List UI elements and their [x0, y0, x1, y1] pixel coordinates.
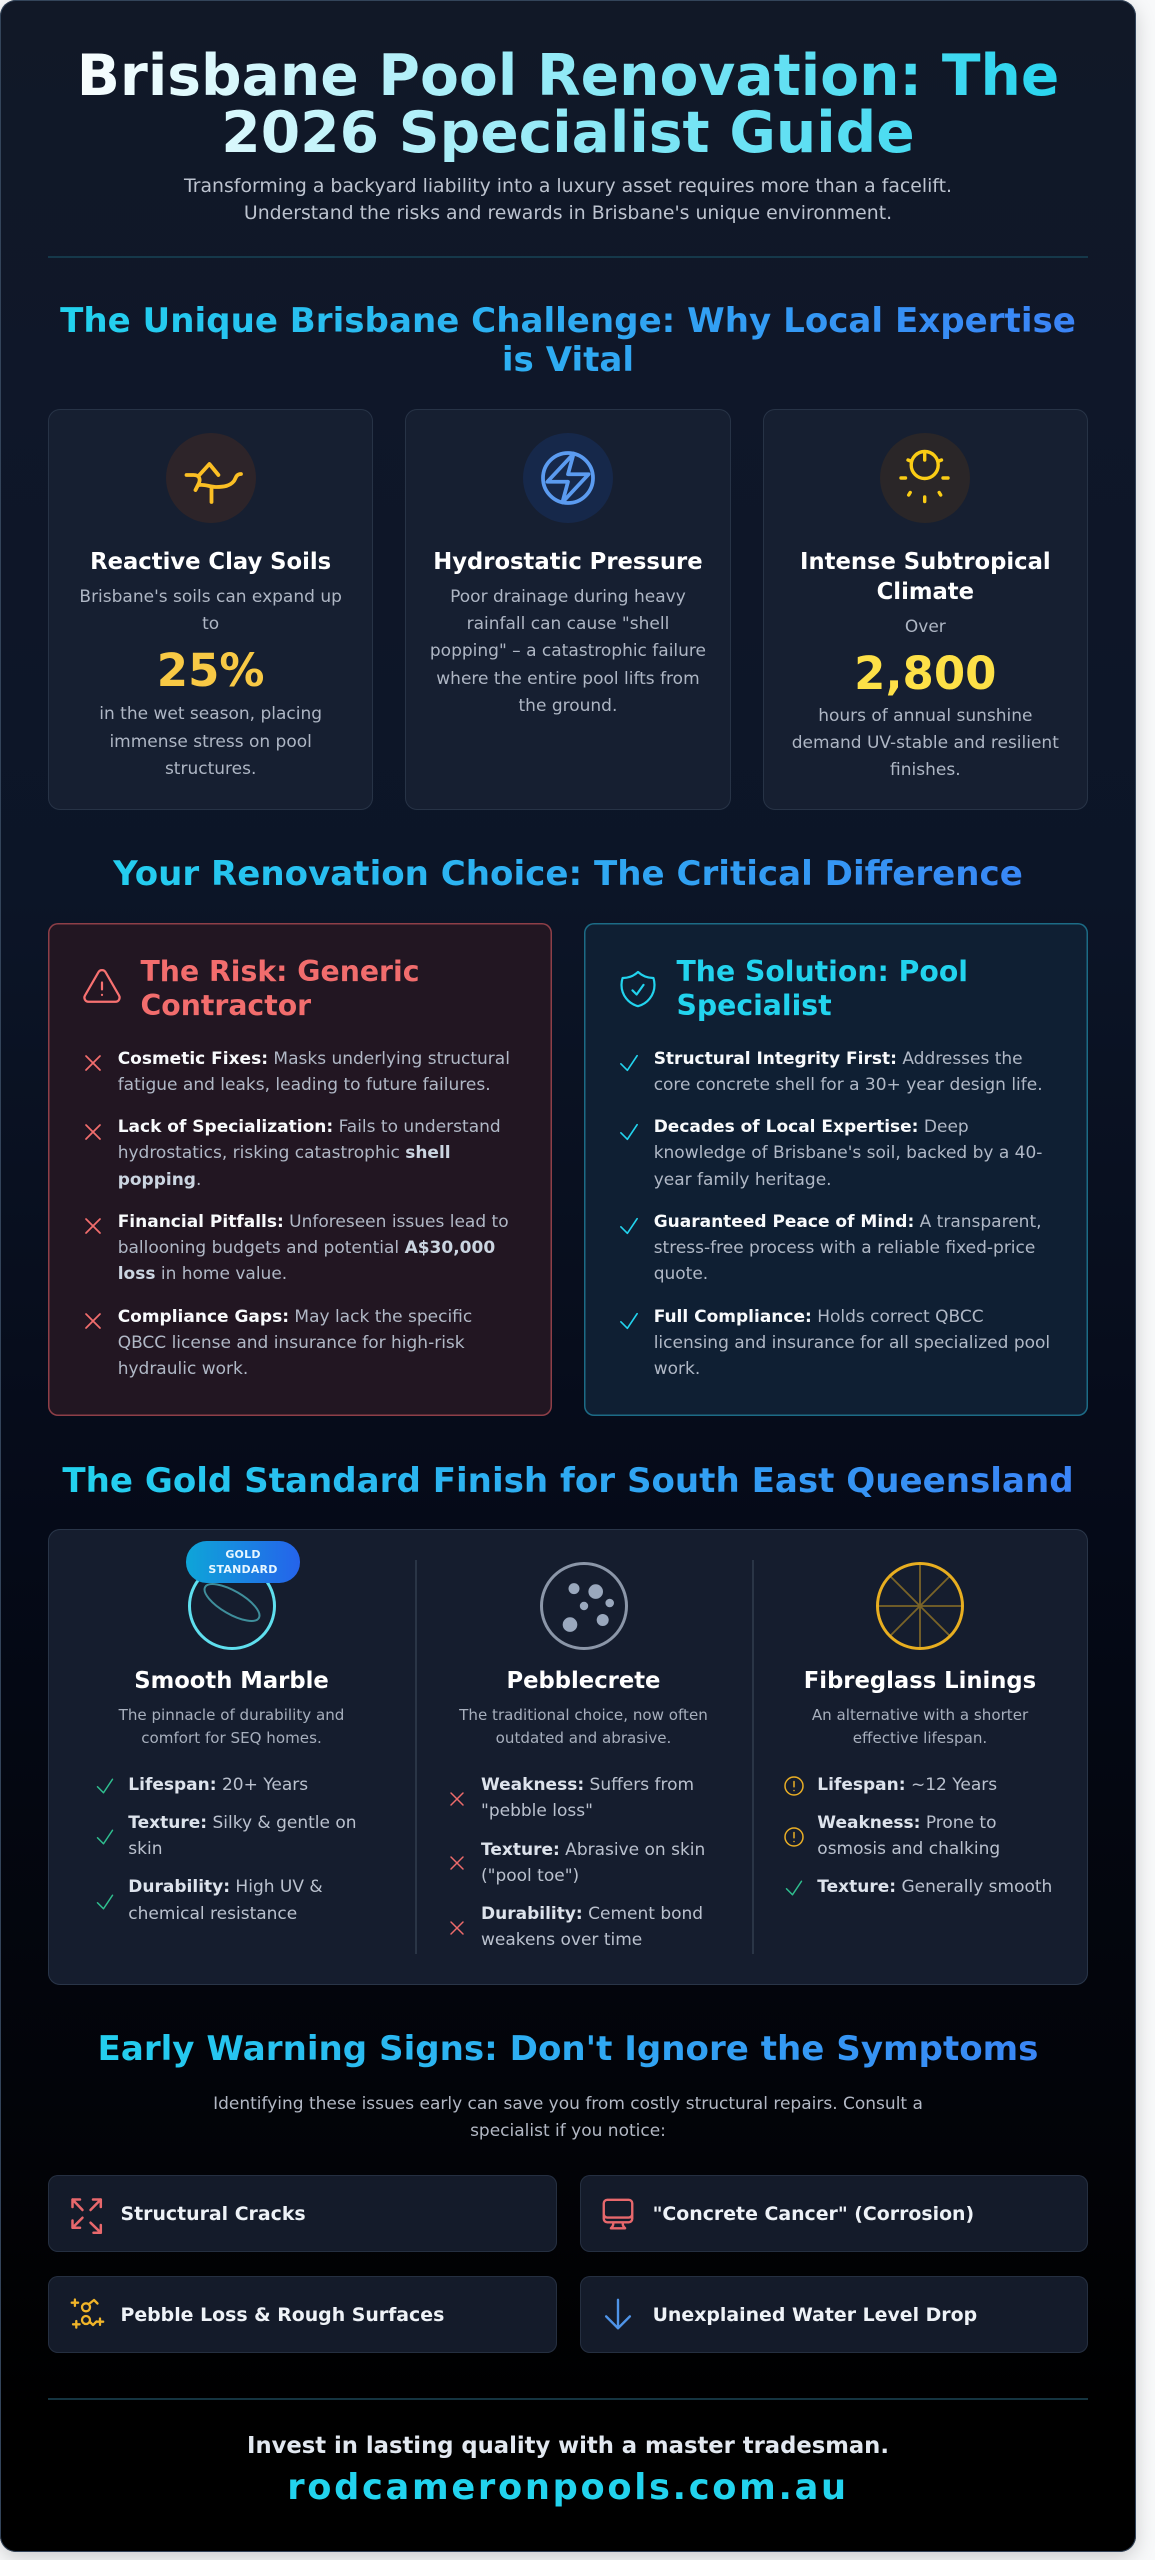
card title: Intense Subtropical — [800, 549, 1051, 575]
badge: gold standard: GOLD — [225, 1548, 261, 1561]
spec: weakness — [481, 1772, 694, 1825]
finish name: Smooth Marble — [134, 1668, 329, 1694]
card text continued: in the wet season, placing — [99, 704, 322, 724]
section heading: the unique Brisbane challenge: The Unique Brisbane Challenge: Why Local Expertise — [60, 301, 1076, 341]
card text: to — [202, 614, 219, 634]
card text — [79, 587, 342, 634]
section heading: the unique Brisbane challenge: is Vital — [502, 340, 634, 380]
card text continued — [792, 706, 1059, 780]
stat: 25%: 25% — [157, 644, 264, 697]
subtitle: Transforming a backyard liability into a luxury asset requires more than a facelift. — [184, 176, 952, 196]
icon: cross — [85, 1218, 101, 1234]
warning label: Unexplained Water Level Drop — [653, 2304, 977, 2326]
finish description: The pinnacle of durability and — [119, 1706, 344, 1724]
card text: rainfall can cause "shell — [467, 614, 669, 634]
panel: the risk, generic contractor — [48, 923, 552, 1416]
list item: financial pitfalls — [118, 1212, 509, 1284]
list item: structural integrity — [654, 1049, 1043, 1095]
column: fibreglass linings — [752, 1529, 1088, 1985]
card text: Over — [905, 617, 946, 637]
list item: peace of mind: quote. — [654, 1264, 708, 1284]
spec: texture: Texture: Silky & gentle on — [128, 1813, 357, 1833]
title — [48, 48, 1088, 162]
warning: pebble loss — [48, 2276, 556, 2353]
panel heading: The Solution: Pool — [676, 955, 968, 988]
card text continued: finishes. — [890, 760, 961, 780]
list item: peace of mind: stress-free process with a reliable fixed-price — [654, 1238, 1035, 1258]
badge: gold standard — [186, 1541, 300, 1583]
list item: financial pitfalls: Financial Pitfalls: Unforeseen issues lead to — [118, 1212, 509, 1232]
spec: durability — [481, 1901, 703, 1953]
icon: fibreglass ring — [876, 1562, 964, 1650]
panel: intense subtropical climate — [763, 409, 1088, 810]
list item: local expertise: Decades of Local Expertise: Deep — [654, 1117, 969, 1137]
icon: check — [96, 1894, 114, 1910]
card title: Climate — [877, 579, 974, 605]
finish description: effective lifespan. — [853, 1728, 987, 1746]
icon: cross — [85, 1124, 101, 1140]
footer website: rodcameronpools.com.au — [287, 2466, 849, 2508]
spec: texture: Texture: Generally smooth — [817, 1877, 1052, 1897]
finish description: An alternative with a shorter — [812, 1706, 1028, 1724]
intro text: Identifying these issues early can save you from costly structural repairs. Consult a — [213, 2094, 923, 2114]
icon: warning circle — [782, 1825, 806, 1849]
finish description — [752, 1704, 1088, 1750]
spec: lifespan: Lifespan: 20+ Years — [128, 1775, 308, 1795]
card text: where the entire pool lifts from — [436, 669, 700, 689]
finish description — [459, 1706, 708, 1746]
spec: durability — [128, 1877, 323, 1924]
spec: durability: chemical resistance — [128, 1904, 297, 1924]
list item: structural integrity: core concrete shell for a 30+ year design life. — [654, 1075, 1043, 1095]
panel: finishes comparison — [48, 1529, 1088, 1985]
icon: down arrow — [599, 2295, 637, 2333]
card text continued: demand UV-stable and resilient — [792, 733, 1059, 753]
finish name: Pebblecrete — [507, 1668, 660, 1694]
spec: weakness: osmosis and chalking — [817, 1839, 1000, 1859]
list item: local expertise: knowledge of Brisbane's soil, backed by a 40- — [654, 1143, 1042, 1163]
card text continued: structures. — [165, 759, 256, 779]
spec: texture: ("pool toe") — [481, 1866, 579, 1886]
list item: lack of specialization: popping. — [118, 1170, 201, 1190]
spec: texture: skin — [128, 1839, 162, 1859]
list item: full compliance: work. — [654, 1359, 700, 1379]
card text continued: immense stress on pool — [109, 732, 312, 752]
icon: check — [620, 1312, 638, 1330]
header — [48, 43, 1088, 258]
list item: structural integrity: Structural Integrity First: Addresses the — [654, 1049, 1023, 1069]
panel: the solution, pool specialist — [584, 923, 1088, 1416]
finish description: The traditional choice, now often — [459, 1706, 708, 1724]
icon: cross — [445, 1851, 469, 1875]
list item: full compliance — [654, 1306, 1050, 1379]
icon: rough surface — [68, 2295, 108, 2335]
list item: compliance gaps: hydraulic work. — [118, 1359, 248, 1379]
spec: durability: Durability: Cement bond — [481, 1904, 703, 1924]
spec: weakness: Weakness: Prone to — [817, 1813, 996, 1833]
warning: structural cracks — [48, 2175, 556, 2252]
warning label: Structural Cracks — [120, 2203, 306, 2225]
intro text: specialist if you notice: — [470, 2121, 666, 2141]
icon: sun — [880, 433, 970, 523]
card text continued: hours of annual sunshine — [818, 706, 1032, 726]
title: Brisbane Pool Renovation: The — [77, 43, 1059, 109]
stat: 2,800: 2,800 — [854, 646, 996, 700]
list item: lack of specialization: hydrostatics, risking catastrophic shell — [118, 1143, 451, 1163]
column: smooth marble — [96, 1541, 357, 1924]
list item: full compliance: licensing and insurance for all specialized pool — [654, 1333, 1050, 1353]
icon: check — [620, 1054, 638, 1072]
icon: cracks arrows — [68, 2195, 108, 2237]
column: pebblecrete — [450, 1562, 708, 1950]
spec: durability: weakens over time — [481, 1930, 642, 1950]
icon: warning circle — [782, 1774, 806, 1798]
list item: compliance gaps: QBCC license and insurance for high-risk — [118, 1333, 465, 1353]
spec: texture: Texture: Abrasive on skin — [481, 1840, 705, 1860]
icon: desktop — [599, 2194, 637, 2232]
icon: marble ring — [188, 1580, 276, 1650]
icon: cross — [85, 1313, 101, 1329]
icon: cross — [85, 1055, 101, 1071]
icon: check — [782, 1876, 806, 1900]
spec: weakness — [817, 1810, 1000, 1863]
section heading: gold standard finish: The Gold Standard Finish for South East Queensland — [62, 1460, 1074, 1500]
warning label: Pebble Loss & Rough Surfaces — [120, 2304, 444, 2326]
section heading: early warning signs: Early Warning Signs: Don't Ignore the Symptoms — [98, 2029, 1038, 2069]
spec: lifespan: Lifespan: ~12 Years — [817, 1775, 997, 1795]
icon: cross — [450, 1792, 464, 1806]
warning label: "Concrete Cancer" (Corrosion) — [653, 2203, 974, 2225]
finish description — [118, 1706, 344, 1746]
icon: check — [96, 1830, 114, 1844]
card text: Poor drainage during heavy — [450, 587, 686, 607]
spec: texture — [481, 1836, 705, 1889]
panel heading — [140, 955, 420, 1022]
subtitle — [184, 176, 952, 224]
icon: check — [96, 1778, 114, 1794]
icon: bolt in circle — [523, 433, 613, 523]
icon: check — [620, 1124, 638, 1140]
icon: warning triangle — [83, 969, 121, 1003]
warning: water level drop — [580, 2276, 1088, 2353]
panel heading: Specialist — [676, 989, 832, 1022]
list item: compliance gaps: Compliance Gaps: May lack the specific — [118, 1306, 472, 1326]
card title: Reactive Clay Soils — [90, 549, 331, 575]
spec: durability: Durability: High UV & — [128, 1877, 323, 1897]
card title — [800, 549, 1051, 605]
list item: financial pitfalls: loss in home value. — [118, 1264, 287, 1284]
panel: reactive clay soils — [48, 409, 373, 810]
icon: clay soil — [166, 433, 256, 523]
card text — [430, 587, 706, 716]
list item: lack of specialization: Lack of Specialization: Fails to understand — [118, 1117, 501, 1137]
list item: cosmetic fixes: fatigue and leaks, leading to future failures. — [118, 1075, 491, 1095]
list item: peace of mind: Guaranteed Peace of Mind: A transparent, — [654, 1212, 1042, 1232]
title: 2026 Specialist Guide — [221, 100, 915, 166]
panel heading: The Risk: Generic — [140, 955, 420, 988]
list item: full compliance: Full Compliance: Holds correct QBCC — [654, 1306, 984, 1326]
card text: the ground. — [519, 696, 617, 716]
list item: compliance gaps — [118, 1306, 472, 1379]
footer — [0, 2398, 1136, 2538]
finish description: comfort for SEQ homes. — [141, 1728, 322, 1746]
panel heading — [676, 955, 968, 1022]
warning: concrete cancer — [580, 2175, 1088, 2252]
panel: hydrostatic pressure — [405, 409, 731, 810]
list item: peace of mind — [654, 1212, 1042, 1284]
icon: cross — [445, 1916, 469, 1940]
icon: check — [620, 1218, 638, 1234]
card text continued — [99, 704, 322, 779]
list item: cosmetic fixes: Cosmetic Fixes: Masks underlying structural — [118, 1049, 510, 1069]
footer tagline: Invest in lasting quality with a master tradesman. — [247, 2433, 889, 2459]
finish name: Fibreglass Linings — [804, 1668, 1036, 1694]
card text: popping" – a catastrophic failure — [430, 641, 706, 661]
list item: cosmetic fixes — [118, 1049, 510, 1095]
panel heading: Contractor — [140, 989, 311, 1022]
section heading: renovation choice: Your Renovation Choice: The Critical Difference — [113, 854, 1023, 894]
finish description: outdated and abrasive. — [496, 1728, 671, 1746]
subtitle: Understand the risks and rewards in Brisbane's unique environment. — [244, 202, 892, 224]
spec: weakness: Weakness: Suffers from — [481, 1775, 694, 1795]
icon: shield check — [620, 970, 656, 1008]
list item: local expertise — [654, 1117, 1042, 1190]
list item: financial pitfalls: ballooning budgets and potential A$30,000 — [118, 1238, 495, 1258]
badge: gold standard: STANDARD — [208, 1563, 278, 1576]
list item: lack of specialization — [118, 1117, 501, 1190]
section heading: the unique Brisbane challenge — [48, 302, 1088, 379]
spec: texture — [128, 1813, 357, 1859]
intro text — [48, 2091, 1088, 2144]
spec: weakness: "pebble loss" — [481, 1801, 593, 1821]
card title: Hydrostatic Pressure — [433, 549, 703, 575]
list item: local expertise: year family heritage. — [654, 1170, 832, 1190]
card text: Brisbane's soils can expand up — [79, 587, 342, 607]
icon: pebble ring — [540, 1562, 628, 1650]
